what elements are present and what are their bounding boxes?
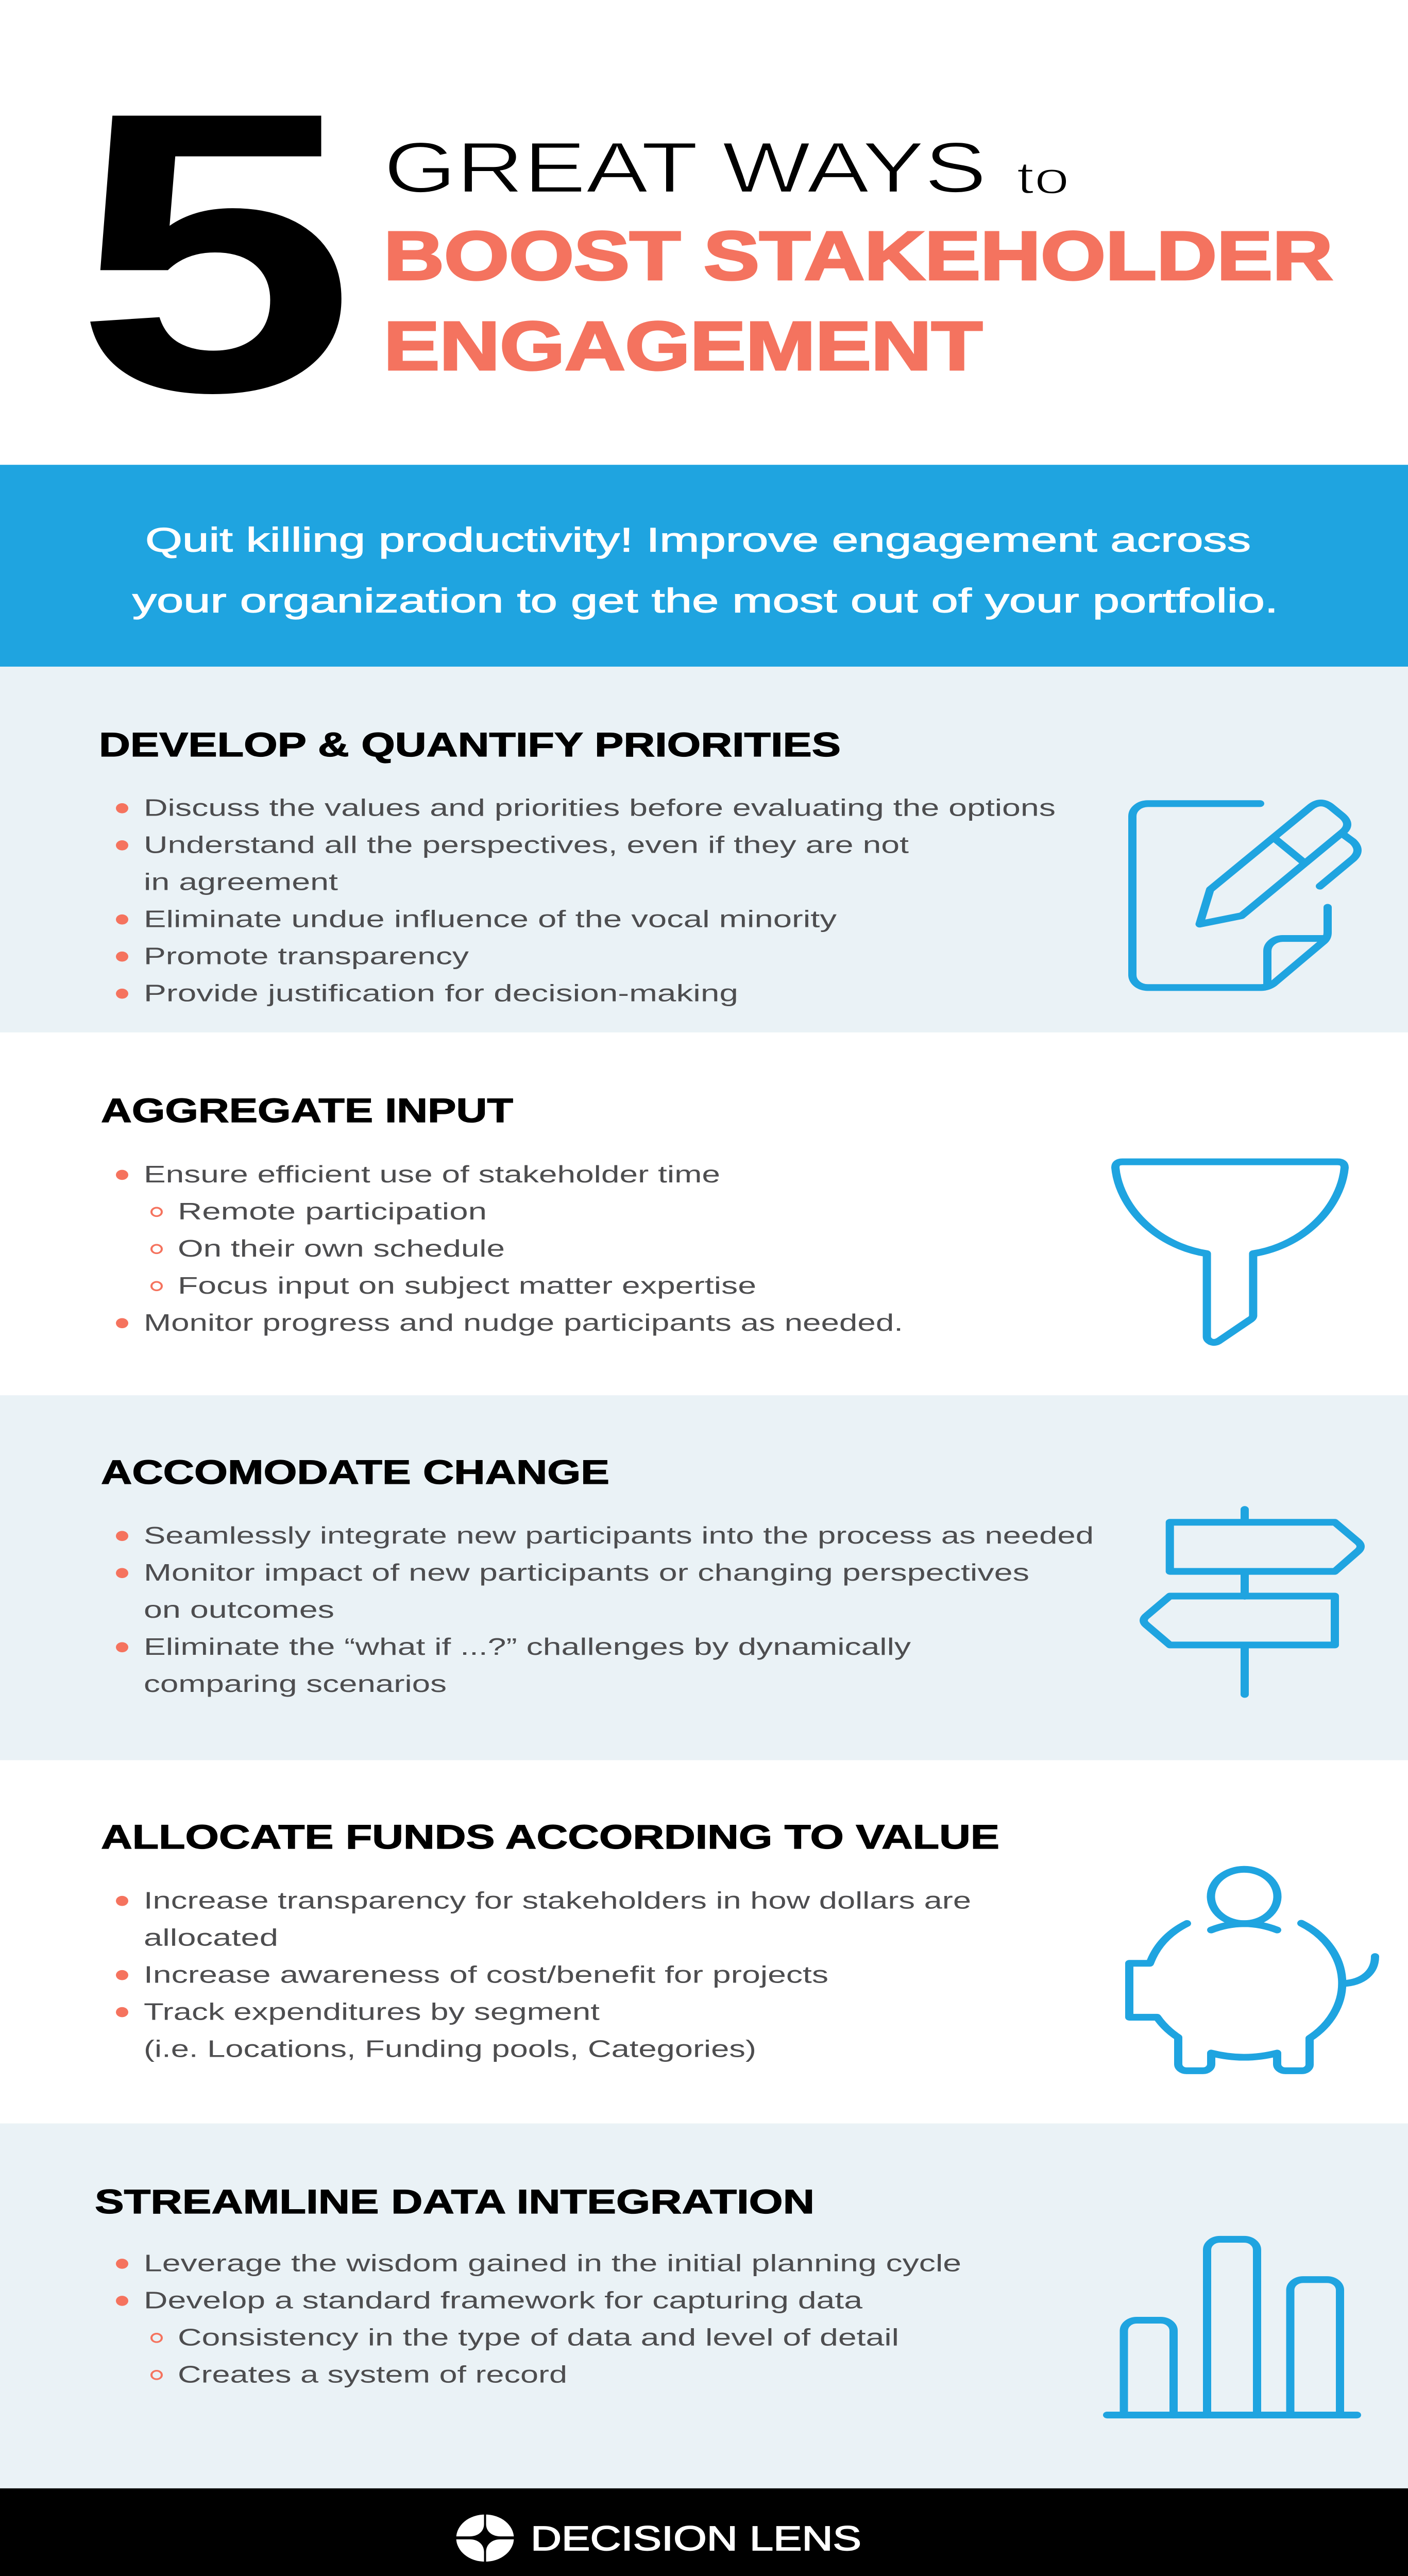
panel: aggregate input [0,1032,1408,1395]
heading: AGGREGATE INPUT [101,1092,513,1129]
icon: signpost [1144,1510,1361,1694]
bullet list: Monitor progress and nudge participants as needed. [144,1310,903,1336]
bullet list: Promote transparency [144,943,469,970]
bullet list: Eliminate the “what if ...?” challenges by dynamically [144,1634,911,1660]
title line: great ways to: GREAT WAYS [384,127,987,208]
footer bar [0,2488,1408,2576]
bullet list: Remote participation [178,1198,487,1225]
bullet list: Monitor impact of new participants or changing perspectives [144,1560,1029,1586]
logo wordmark: DECISION LENS [531,2519,861,2557]
bullet list: allocated [144,1924,278,1951]
panel: accommodate change [0,1395,1408,1760]
banner text: Quit killing productivity! Improve engagement across [145,521,1251,559]
bullet list: Provide justification for decision-making [144,980,738,1007]
bullet list: Develop a standard framework for capturing data [144,2287,862,2314]
bullet list: Eliminate undue influence of the vocal minority [144,906,837,933]
bullet list [116,2250,961,2388]
panel: streamline data integration [0,2124,1408,2488]
bullet list: Increase transparency for stakeholders in how dollars are [144,1887,971,1914]
bullet list: Track expenditures by segment [144,1998,600,2025]
bullet list [116,1887,971,2062]
bullet list: Understand all the perspectives, even if they are not [144,832,909,858]
bullet list: in agreement [144,869,338,895]
title block [75,29,1333,475]
banner text: your organization to get the most out of your portfolio. [132,582,1278,620]
banner text [132,521,1278,620]
icon: piggy bank [1129,1869,1375,2071]
icon: funnel [1115,1162,1345,1343]
bullet list [116,1522,1094,1698]
heading: STREAMLINE DATA INTEGRATION [95,2183,815,2221]
heading: DEVELOP & QUANTIFY PRIORITIES [99,726,841,764]
heading: ALLOCATE FUNDS ACCORDING TO VALUE [101,1819,999,1856]
bullet list: (i.e. Locations, Funding pools, Categories) [144,2036,756,2062]
bullet list: Focus input on subject matter expertise [178,1273,756,1299]
bullet list: Increase awareness of cost/benefit for projects [144,1961,828,1988]
bullet list [116,794,1056,1007]
heading: ACCOMODATE CHANGE [101,1454,609,1491]
bullet list: Ensure efficient use of stakeholder time [144,1161,720,1188]
bullet list [116,1161,903,1336]
panel: develop and quantify priorities [0,667,1408,1032]
bullet list: Creates a system of record [178,2361,567,2388]
icon: bar chart [1107,2239,1357,2415]
blue intro banner [0,465,1408,667]
title line: boost stakeholder: BOOST STAKEHOLDER [384,217,1333,294]
bullet list: Seamlessly integrate new participants into the process as needed [144,1522,1094,1549]
panel: allocate funds according to value [0,1760,1408,2124]
icon: document and pen [1132,803,1358,988]
bullet list: Discuss the values and priorities before evaluating the options [144,794,1056,821]
bullet list: On their own schedule [178,1235,505,1262]
bullet list: comparing scenarios [144,1671,447,1698]
title line: engagement: ENGAGEMENT [384,307,982,384]
title line: great ways to: to [1016,152,1070,203]
big number 5: 5 [75,29,355,475]
bullet list: Leverage the wisdom gained in the initial planning cycle [144,2250,961,2277]
logo mark [453,2512,517,2564]
bullet list: on outcomes [144,1597,334,1623]
bullet list: Consistency in the type of data and level of detail [178,2324,899,2351]
